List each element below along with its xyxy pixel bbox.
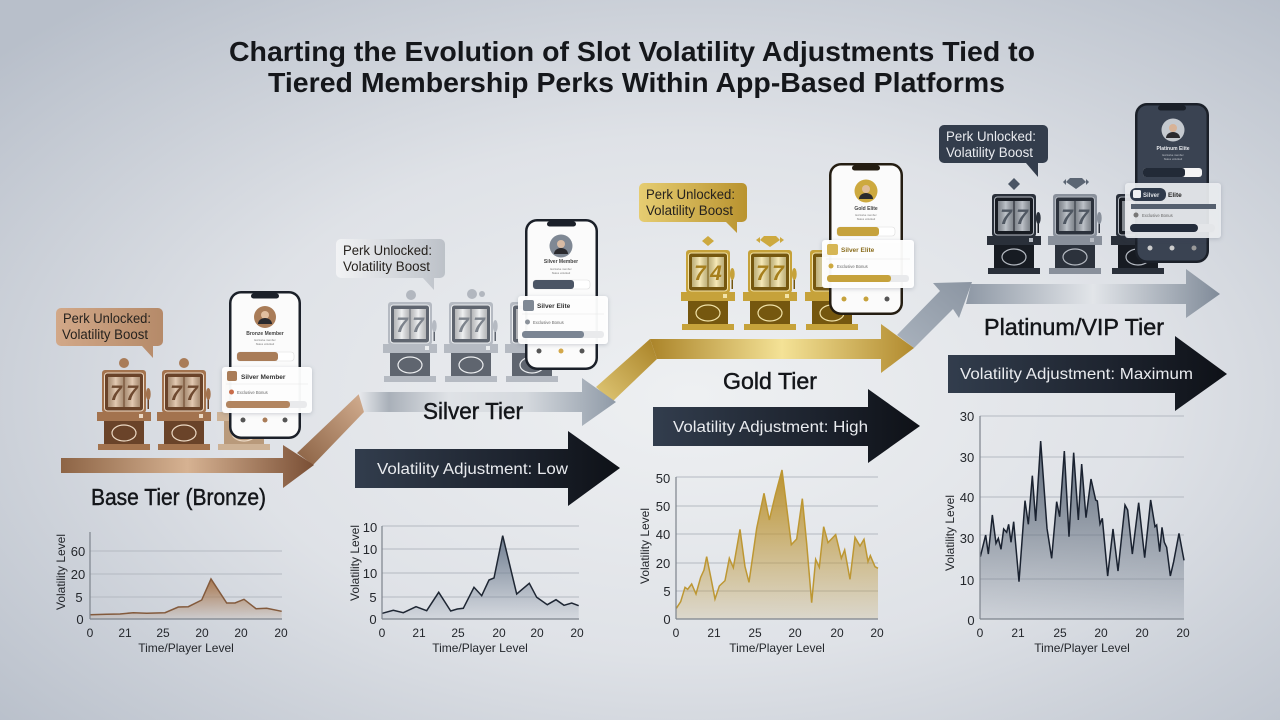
chart: gold volatility: Volatility Level [638, 508, 652, 584]
callout: bronze perk: Volatility Boost [62, 327, 148, 342]
arrow: volatility adjustment high [653, 389, 920, 463]
icon: bronze phone: Bronze Member [246, 331, 284, 337]
panel: bronze phone popup: Exclusive Bonus [237, 390, 268, 395]
icon: bronze phone: Exclusive member [254, 338, 276, 342]
panel: silver tier [336, 219, 620, 655]
icon: gold phone: Status unlocked [857, 217, 876, 221]
chart: platinum volatility: 0 [977, 626, 984, 640]
chart: silver volatility: Time/Player Level [432, 641, 528, 655]
callout: silver perk: Perk Unlocked: [343, 243, 432, 258]
callout: gold perk [639, 183, 747, 233]
chart: bronze volatility: Time/Player Level [138, 641, 234, 655]
callout: platinum perk [939, 125, 1048, 177]
chart: gold volatility [638, 470, 884, 655]
icon: gold slot machines [681, 236, 859, 330]
arrow: bronze [61, 445, 314, 488]
chart: platinum volatility [943, 409, 1190, 655]
chart: platinum volatility: 40 [960, 490, 974, 505]
chart: gold volatility: 25 [748, 626, 762, 640]
chart: gold volatility: 0 [673, 626, 680, 640]
icon: gold slot machines: 7 [694, 262, 707, 285]
icon: silver slot machines: 7 [457, 314, 470, 337]
chart: silver volatility: 10 [363, 566, 377, 581]
chart: gold volatility: 20 [830, 626, 844, 640]
chart: bronze volatility: 20 [274, 626, 288, 640]
chart: platinum volatility: 30 [960, 531, 974, 546]
arrow: silver [358, 378, 616, 426]
chart: silver volatility: 0 [379, 626, 386, 640]
panel: platinum phone popup: Silver [1143, 193, 1160, 199]
chart: gold volatility: 20 [788, 626, 802, 640]
chart: platinum volatility: 30 [960, 409, 974, 424]
chart: silver volatility: 20 [570, 626, 584, 640]
chart: bronze volatility: 60 [71, 544, 85, 559]
icon: bronze slot machines [97, 358, 271, 450]
panel: bronze phone popup [222, 367, 312, 413]
chart: silver volatility: 10 [363, 520, 377, 535]
icon: silver slot machines: 7 [412, 314, 425, 337]
callout: silver perk: Volatility Boost [343, 259, 430, 274]
icon: platinum slot machines: 7 [1000, 206, 1013, 229]
arrow: volatility adjustment high: Volatility Adjustment: High [673, 419, 868, 436]
arrow: volatility adjustment maximum [948, 336, 1227, 411]
icon: platinum phone: Exclusive member [1162, 153, 1184, 157]
panel: gold phone popup: Silver Elite [841, 247, 875, 254]
panel: gold phone popup [822, 240, 914, 288]
chart: platinum volatility: 0 [967, 613, 975, 628]
icon: gold phone: Exclusive member [855, 213, 877, 217]
chart: silver volatility: 20 [492, 626, 506, 640]
icon: silver slot machines: 7 [473, 314, 486, 337]
icon: platinum slot machines: 7 [1016, 206, 1029, 229]
heading: gold tier: Gold Tier [723, 368, 817, 394]
panel: bronze phone popup: Silver Member [241, 374, 286, 381]
callout: gold perk: Volatility Boost [646, 203, 733, 218]
chart: platinum volatility: 21 [1011, 626, 1025, 640]
chart: platinum volatility: Volatility Level [943, 495, 957, 571]
chart: platinum volatility: 20 [1135, 626, 1149, 640]
chart: gold volatility: 20 [870, 626, 884, 640]
panel: silver phone popup: Exclusive Bonus [533, 320, 564, 325]
callout: bronze perk [56, 308, 163, 358]
icon: platinum slot machines [987, 178, 1165, 274]
heading: platinum tier: Platinum/VIP Tier [984, 314, 1164, 340]
chart: gold volatility: 0 [663, 612, 671, 627]
panel: bronze tier [54, 291, 314, 655]
chart: gold volatility: 21 [707, 626, 721, 640]
panel: platinum tier [939, 103, 1227, 655]
title: Charting the Evolution of Slot Volatility Adjustments Tied to [229, 36, 1035, 67]
icon: silver phone: Status unlocked [552, 271, 571, 275]
icon: platinum slot machines: 7 [1061, 206, 1074, 229]
chart: bronze volatility: 20 [71, 567, 85, 582]
arrow: volatility adjustment maximum: Volatility Adjustment: Maximum [960, 366, 1193, 383]
arrow: platinum [966, 269, 1220, 318]
icon: gold slot machines: 7 [772, 262, 785, 285]
icon: bronze slot machines: 7 [126, 382, 139, 405]
heading: bronze tier: Base Tier (Bronze) [91, 484, 266, 510]
icon: silver slot machines: 7 [396, 314, 409, 337]
chart: platinum volatility: 10 [960, 573, 974, 588]
icon: platinum phone [1135, 103, 1209, 263]
icon: gold phone: Gold Elite [854, 206, 878, 212]
chart: platinum volatility: 20 [1176, 626, 1190, 640]
arrow connectors between tiers [297, 282, 972, 465]
chart: bronze volatility: 20 [195, 626, 209, 640]
chart: gold volatility: Time/Player Level [729, 641, 825, 655]
arrow: gold [650, 324, 914, 373]
callout: platinum perk: Perk Unlocked: [946, 129, 1036, 144]
chart: bronze volatility: 25 [156, 626, 170, 640]
chart: bronze volatility: 5 [75, 590, 83, 605]
chart: silver volatility: 10 [363, 542, 377, 557]
callout: silver perk [336, 239, 445, 290]
chart: gold volatility: 5 [663, 584, 671, 599]
title: Tiered Membership Perks Within App-Based Platforms [268, 67, 1005, 98]
icon: gold phone [829, 163, 903, 315]
icon: platinum phone: Status unlocked [1164, 157, 1183, 161]
chart: gold volatility: 50 [656, 471, 670, 486]
chart: silver volatility: Volatility Level [348, 525, 362, 601]
panel: gold phone popup: Exclusive Bonus [837, 264, 868, 269]
arrow: volatility adjustment low [355, 431, 620, 506]
arrow: volatility adjustment low: Volatility Adjustment: Low [377, 461, 568, 478]
icon: silver phone: Exclusive member [550, 267, 572, 271]
icon: silver phone [525, 219, 598, 370]
chart: silver volatility: 20 [530, 626, 544, 640]
icon: bronze phone [229, 291, 301, 439]
chart: platinum volatility: 20 [1094, 626, 1108, 640]
icon: bronze phone: Status unlocked [256, 342, 275, 346]
chart: bronze volatility [54, 532, 288, 655]
panel: silver phone popup [518, 296, 608, 344]
chart: platinum volatility: 25 [1053, 626, 1067, 640]
icon: platinum slot machines: 7 [1077, 206, 1090, 229]
chart: bronze volatility: 20 [234, 626, 248, 640]
chart: bronze volatility: 0 [87, 626, 94, 640]
chart: silver volatility: 21 [412, 626, 426, 640]
chart: bronze volatility: 0 [76, 612, 84, 627]
panel: gold tier [638, 163, 920, 655]
chart: silver volatility: 25 [451, 626, 465, 640]
icon: bronze slot machines: 7 [170, 382, 183, 405]
panel: platinum phone popup: Exclusive Bonus [1142, 213, 1173, 218]
icon: bronze slot machines: 7 [186, 382, 199, 405]
icon: gold slot machines: 7 [756, 262, 769, 285]
icon: bronze slot machines: 7 [110, 382, 123, 405]
icon: silver slot machines [383, 289, 559, 382]
chart: bronze volatility: 21 [118, 626, 132, 640]
chart: silver volatility: 5 [369, 590, 377, 605]
chart: gold volatility: 50 [656, 499, 670, 514]
callout: platinum perk: Volatility Boost [946, 145, 1033, 160]
chart: bronze volatility: Volatility Level [54, 534, 68, 610]
title [229, 36, 1035, 98]
callout: gold perk: Perk Unlocked: [646, 187, 735, 202]
chart: silver volatility [348, 520, 584, 655]
callout: bronze perk: Perk Unlocked: [63, 311, 151, 326]
panel: platinum phone popup: Elite [1168, 192, 1182, 199]
icon: platinum phone: Platinum Elite [1156, 146, 1190, 152]
panel: silver phone popup: Silver Elite [537, 303, 571, 310]
icon: silver phone: Silver Member [544, 259, 578, 265]
icon: gold slot machines: 4 [709, 262, 722, 285]
chart: gold volatility: 20 [656, 556, 670, 571]
chart: gold volatility: 40 [656, 527, 670, 542]
panel: platinum phone popup [1125, 183, 1221, 238]
chart: platinum volatility: Time/Player Level [1034, 641, 1130, 655]
heading: silver tier: Silver Tier [423, 398, 523, 424]
chart: platinum volatility: 30 [960, 450, 974, 465]
chart: silver volatility: 0 [369, 612, 377, 627]
